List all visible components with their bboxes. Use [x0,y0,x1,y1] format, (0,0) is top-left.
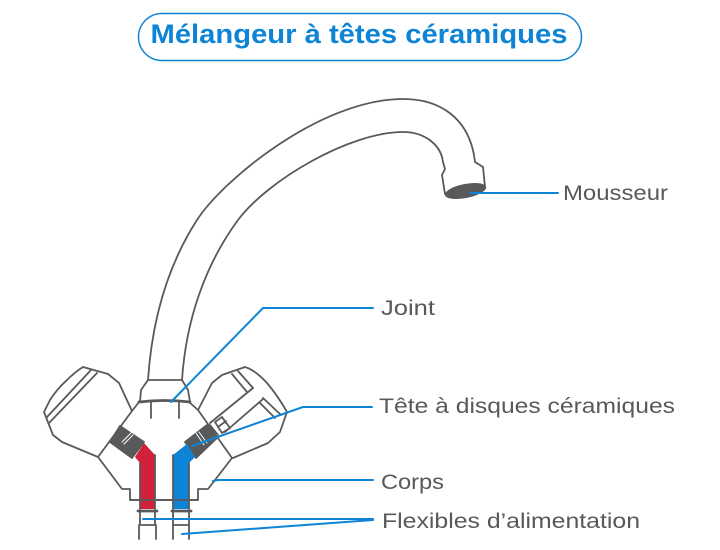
title [138,14,582,60]
left ceramic cartridge [110,426,144,458]
label: flexibles d'alimentation: Flexibles d’alimentation [382,510,640,533]
valve body [98,402,232,500]
label: tête à disques céramiques: Tête à disques céramiques [379,395,675,418]
label: joint: Joint [381,297,435,320]
labels [379,182,675,533]
spout [148,99,485,380]
red hot water channel [135,443,155,509]
left supply hose [138,511,157,539]
faucet illustration [44,99,487,539]
aerator [444,180,487,202]
collar [140,380,190,402]
right ceramic cartridge [185,425,217,458]
blue cold water channel [173,444,195,509]
label: mousseur: Mousseur [563,182,668,205]
left handle [44,367,132,457]
right supply hose [172,511,191,539]
leader lines [143,193,558,534]
right handle [198,367,287,458]
title: Mélangeur à têtes céramiques [150,19,568,49]
label: corps: Corps [381,471,444,494]
